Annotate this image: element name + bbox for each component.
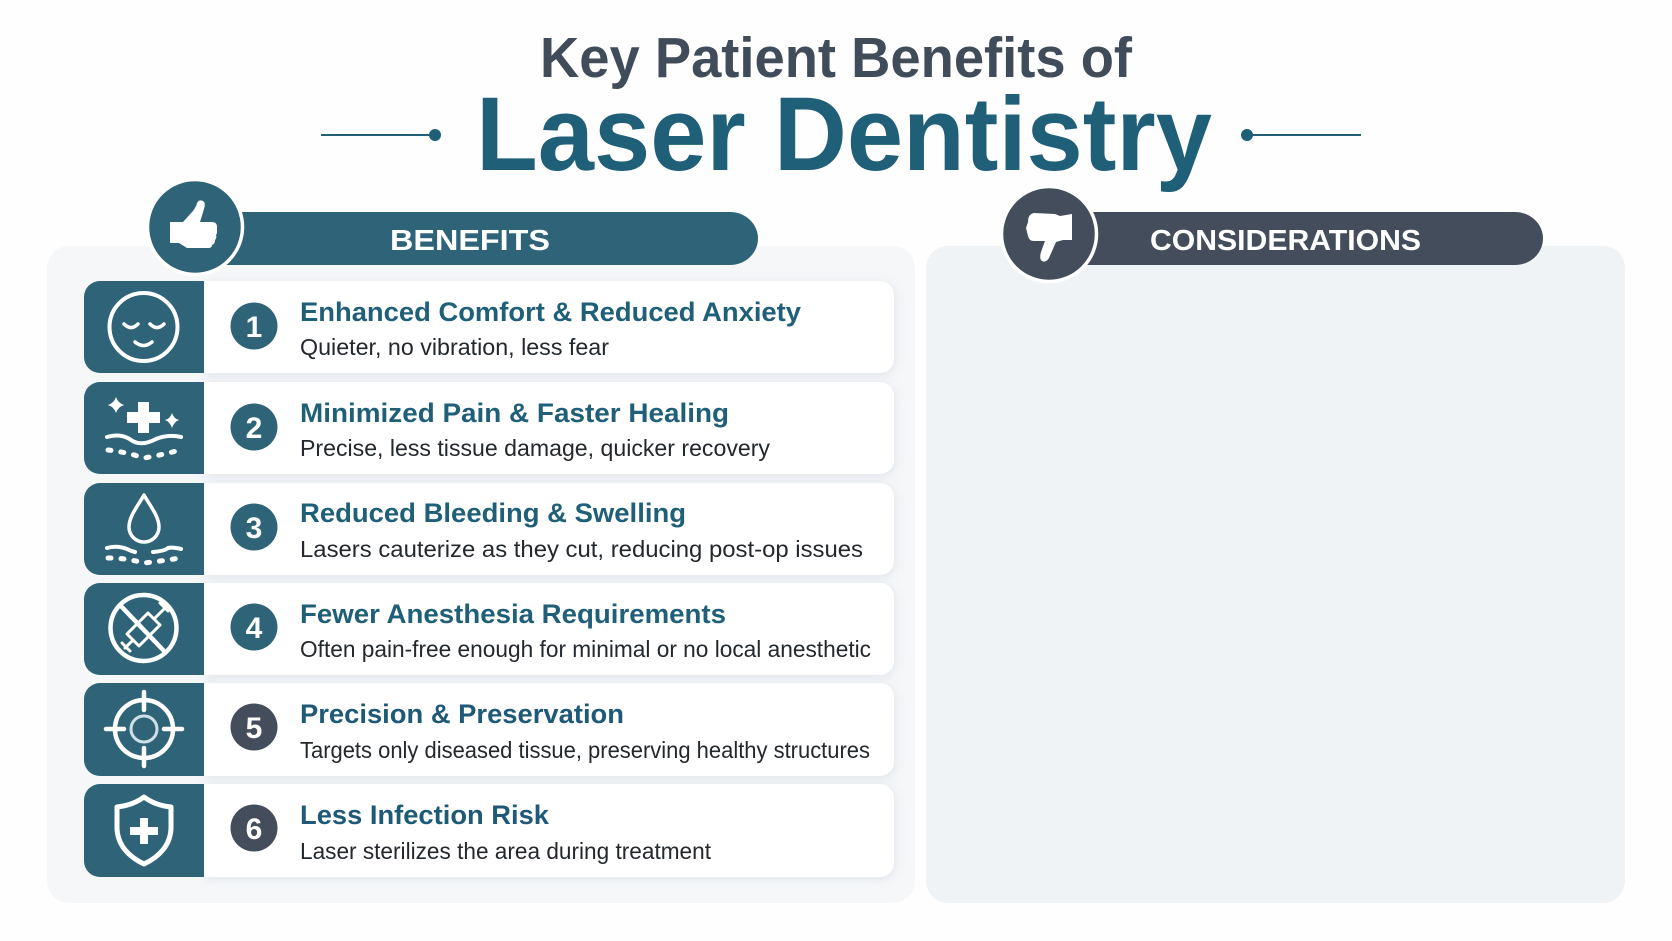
title line 1: Key Patient Benefits of bbox=[540, 26, 1133, 90]
considerations label: CONSIDERATIONS bbox=[1150, 225, 1421, 257]
row 2: minimized pain bbox=[84, 382, 894, 474]
panel: benefits background bbox=[47, 246, 915, 903]
number badge 4: 4 bbox=[246, 612, 263, 645]
row 6: infection risk bbox=[84, 784, 894, 877]
row 4: fewer anesthesia bbox=[84, 583, 894, 675]
heading 4: Fewer Anesthesia Requirements bbox=[300, 599, 726, 629]
icon: target crosshair bbox=[106, 692, 182, 766]
title bbox=[476, 26, 1212, 193]
number badge 3 bbox=[230, 504, 278, 550]
number badge 2: 2 bbox=[246, 412, 262, 445]
icon block bbox=[84, 382, 204, 474]
number badge 5 bbox=[230, 704, 278, 750]
card bbox=[204, 382, 894, 474]
heading 1: Enhanced Comfort & Reduced Anxiety bbox=[300, 297, 801, 327]
heading 5: Precision & Preservation bbox=[300, 699, 624, 729]
description 3: Lasers cauterize as they cut, reducing post-op issues bbox=[300, 536, 863, 562]
row 3: reduced bleeding bbox=[84, 483, 894, 575]
row 1: enhanced comfort bbox=[84, 281, 894, 373]
description 4: Often pain-free enough for minimal or no local anesthetic bbox=[300, 636, 871, 662]
description 2: Precise, less tissue damage, quicker recovery bbox=[300, 435, 770, 461]
card bbox=[204, 683, 894, 776]
benefits pill bbox=[220, 212, 758, 265]
number badge 1: 1 bbox=[246, 311, 262, 344]
card bbox=[204, 583, 894, 675]
heading 6: Less Infection Risk bbox=[300, 800, 550, 830]
icon: blood drop bbox=[107, 495, 181, 563]
considerations pill bbox=[1075, 212, 1543, 265]
card bbox=[204, 483, 894, 575]
icon block bbox=[84, 784, 204, 877]
icon: healing skin bbox=[107, 397, 181, 458]
row 5: precision bbox=[84, 683, 894, 776]
heading 3: Reduced Bleeding & Swelling bbox=[300, 498, 686, 528]
panel: considerations background bbox=[926, 246, 1625, 903]
decorative line right of title bbox=[1241, 129, 1361, 141]
considerations header bbox=[1002, 186, 1543, 282]
number badge 1 bbox=[230, 302, 278, 350]
benefits label: BENEFITS bbox=[390, 225, 550, 257]
number badge 5: 5 bbox=[246, 712, 262, 745]
card bbox=[204, 784, 894, 877]
description 5: Targets only diseased tissue, preserving healthy structures bbox=[300, 737, 870, 763]
icon: relaxed face bbox=[110, 293, 178, 361]
icon: no syringe bbox=[110, 595, 176, 661]
title line 2: Laser Dentistry bbox=[476, 76, 1212, 193]
card bbox=[204, 281, 894, 373]
icon: shield bbox=[117, 797, 171, 864]
number badge 3: 3 bbox=[246, 512, 262, 545]
number badge 2 bbox=[230, 404, 278, 450]
icon block bbox=[84, 281, 204, 373]
benefits header bbox=[148, 180, 758, 274]
decorative line left of title bbox=[321, 129, 441, 141]
description 1: Quieter, no vibration, less fear bbox=[300, 334, 609, 360]
icon: thumbs up bbox=[148, 180, 242, 274]
heading 2: Minimized Pain & Faster Healing bbox=[300, 398, 729, 428]
icon block bbox=[84, 583, 204, 675]
icon block bbox=[84, 683, 204, 776]
number badge 4 bbox=[230, 604, 278, 650]
number badge 6 bbox=[230, 804, 278, 852]
description 6: Laser sterilizes the area during treatment bbox=[300, 838, 712, 864]
icon: thumbs down bbox=[1002, 186, 1096, 282]
number badge 6: 6 bbox=[246, 813, 262, 846]
icon block bbox=[84, 483, 204, 575]
